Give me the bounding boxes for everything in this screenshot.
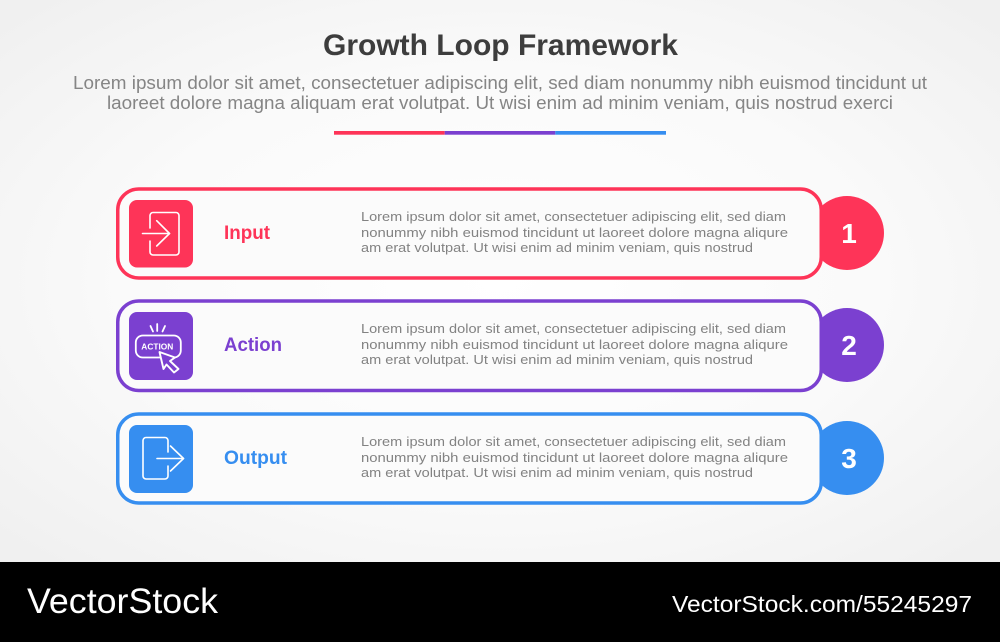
icon: action button with cursor: ACTION [141,342,174,352]
subtitle [73,72,927,113]
description 2: am erat volutpat. Ut wisi enim ad minim veniam, quis nostrud [361,352,753,367]
row 1: input [118,189,884,278]
description 1 [361,209,788,255]
description 2 [361,321,788,367]
description 3: nonummy nibh euismod tincidunt ut laoreet dolore magna aliqure [361,450,788,465]
label: Action: Action [224,335,282,356]
description 2: Lorem ipsum dolor sit amet, consectetuer adipiscing elit, sed diam [361,321,786,336]
subtitle: laoreet dolore magna aliquam erat volutpat. Ut wisi enim ad minim veniam, quis nostrud exerci [107,92,893,113]
subtitle: Lorem ipsum dolor sit amet, consectetuer adipiscing elit, sed diam nonummy nibh euismod tincidunt ut [73,72,927,93]
description 3: Lorem ipsum dolor sit amet, consectetuer adipiscing elit, sed diam [361,434,786,449]
number badge 3: 3 [841,443,857,474]
footer bar [0,562,1000,642]
card outline 1 [118,189,821,278]
label: Input: Input [224,223,271,244]
number badge 1: 1 [841,218,857,249]
number badge 2 [810,308,884,382]
description 1: am erat volutpat. Ut wisi enim ad minim veniam, quis nostrud [361,240,753,255]
card outline 2 [118,301,821,390]
icon: enter door [129,200,193,268]
description 3: am erat volutpat. Ut wisi enim ad minim veniam, quis nostrud [361,465,753,480]
title: Growth Loop Framework [323,29,678,62]
description 3 [361,434,788,480]
description 1: Lorem ipsum dolor sit amet, consectetuer adipiscing elit, sed diam [361,209,786,224]
description 2: nonummy nibh euismod tincidunt ut laoreet dolore magna aliqure [361,337,788,352]
tricolor divider [334,131,666,135]
description 1: nonummy nibh euismod tincidunt ut laoreet dolore magna aliqure [361,225,788,240]
number badge 3 [810,421,884,495]
row 3: output [118,414,884,503]
footer image id: VectorStock.com/55245297 [672,591,972,617]
number badge 2: 2 [841,330,857,361]
row 2: action [118,301,884,390]
icon: action button with cursor [129,312,193,380]
label: Output: Output [224,448,288,469]
card outline 3 [118,414,821,503]
icon: exit door [129,425,193,493]
number badge 1 [810,196,884,270]
footer logo: VectorStock [27,582,219,621]
